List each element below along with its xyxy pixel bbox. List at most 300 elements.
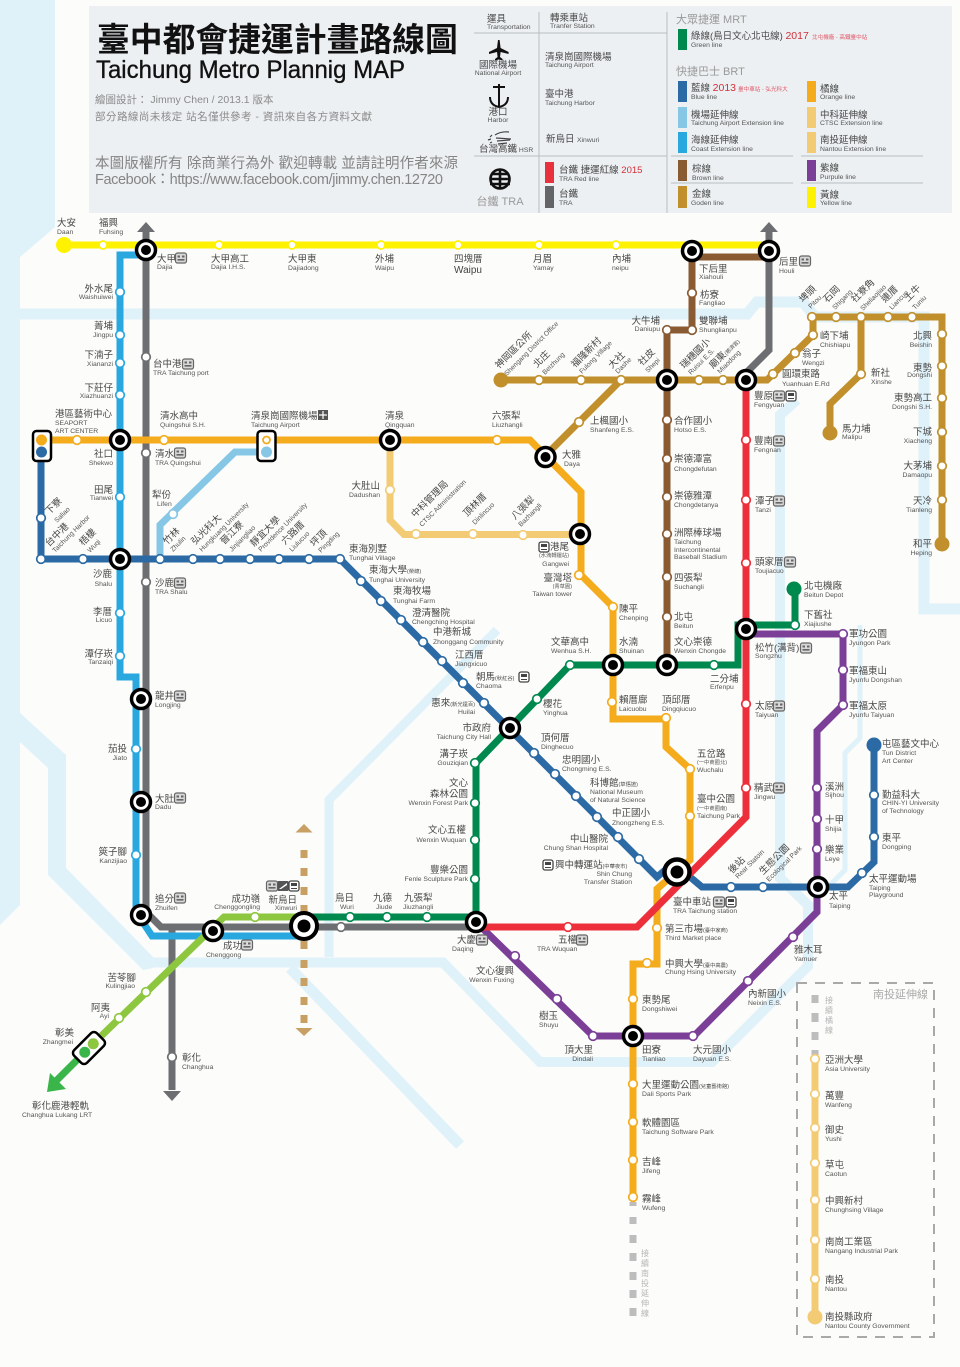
labels: Gold line: Wengzi: [802, 360, 825, 367]
labels: Blue BRT line: Liulucuo: [288, 530, 311, 553]
labels: Blue BRT line: 台中港: [43, 520, 72, 549]
line: Purple: [476, 634, 843, 1036]
legend: TRA lines: [545, 162, 642, 208]
legend: MRT and BRT lines: Blue line: [691, 94, 717, 101]
gray continuation dashes: Orange line: 線: [641, 1308, 649, 1318]
stations: Red: [564, 436, 750, 931]
labels: Blue BRT line: 後站: [726, 854, 748, 876]
credits: 繪圖設計： Jimmy Chen / 2013.1 版本: [95, 93, 274, 106]
labels: Orange line: 清水高中: [160, 410, 198, 422]
labels: Yellow line: 大甲高工: [211, 253, 250, 265]
labels: Gold line: 連厝: [879, 283, 901, 305]
gray continuation dashes: Orange line: 伸: [641, 1298, 649, 1308]
labels: Airport Extension line: Lifen: [157, 501, 172, 508]
labels: Red line: 頭家厝: [755, 556, 784, 568]
labels: Gold line: Miaodong: [716, 349, 743, 375]
icon: anchor: [490, 84, 508, 107]
labels: Orange line: 賴厝廍: [619, 694, 648, 706]
labels: Yellow line: neipu: [612, 265, 629, 272]
legend: MRT and BRT lines: Green line: [691, 42, 723, 49]
labels: Blue BRT line: Zhulin: [169, 535, 188, 553]
transport column: Tranfer Station: [550, 23, 595, 30]
labels: Blue BRT line: Zhonggang Community: [433, 639, 504, 646]
labels: CTSC Extension line: 大肚山: [351, 480, 380, 492]
labels: Purple line: Shuyu: [539, 1022, 558, 1029]
labels: light green and LRT: 彰美: [55, 1027, 74, 1039]
labels: Orange line: 港尾: [550, 541, 569, 553]
line: Green MRT: [304, 590, 795, 917]
arrows: TRA ends: [137, 222, 778, 1101]
labels: TRA line: 台中港: [153, 358, 182, 370]
labels: Orange line: 中興大學(臺中高農): [665, 958, 728, 970]
labels: Yellow line: Houli: [779, 268, 795, 275]
labels: Purple line: Dayuan E.S.: [693, 1056, 731, 1063]
labels: Coast Extension line: Dadu: [155, 804, 171, 811]
labels: Gold line: Beishin: [910, 342, 932, 349]
labels: Purple line: Tianliao: [642, 1056, 666, 1063]
paired station: Seaport Art Center: [33, 431, 51, 461]
labels: Blue BRT line: 朝馬(秋紅谷): [476, 672, 515, 683]
labels: Yellow line: Daan: [57, 229, 73, 236]
labels: Purple line: 田寮: [642, 1044, 662, 1056]
labels: Blue BRT line: Tunghai University: [369, 577, 426, 584]
labels: Blue BRT line: 澄清醫院: [412, 607, 451, 619]
labels: Coast Extension line: Tianwei: [90, 495, 113, 502]
labels: Gold line: Ruisui E.S.: [687, 348, 716, 376]
labels: light green and LRT: [22, 893, 297, 1119]
labels: Gold line: Tianleng: [906, 507, 932, 514]
labels: Nantou Extension line: Nantou County Government: [825, 1323, 910, 1330]
labels: CTSC Extension line: Bazhangli: [517, 502, 544, 528]
labels: Brown line: 枋寮: [700, 289, 720, 301]
labels: Gold line: Pitou: [807, 294, 824, 310]
labels: Brown line: Chongdefutan: [674, 466, 717, 473]
labels: Green line: Gouziqian: [437, 760, 468, 767]
labels: Blue BRT line: Art Center: [882, 758, 914, 765]
labels: Blue BRT line: 頂何厝: [541, 732, 570, 744]
transport column: National Airport: [475, 70, 521, 77]
labels: Gold line: 社皮: [636, 346, 658, 368]
stations: Orange: [73, 436, 694, 1201]
stations: Airport Extension: [169, 510, 177, 518]
labels: light green and LRT: Changhua Lukang LRT: [22, 1112, 92, 1119]
title: [96, 21, 458, 84]
stations: Blue BRT: [37, 514, 878, 891]
labels: Brown line: Daniupu: [635, 326, 660, 333]
labels: Yellow line: Fuhsing: [99, 229, 123, 236]
labels: Yellow line: 大甲東: [288, 253, 317, 265]
labels: Green line: 文心五權: [428, 824, 466, 836]
legend: MRT and BRT lines: Coast Extension line: [691, 146, 753, 153]
labels: Blue BRT line: Taichung City Hall: [437, 734, 491, 741]
labels: CTSC Extension line: 八張犁: [509, 493, 537, 522]
labels: Nantou Extension line: Nangang Industrial Park: [825, 1248, 899, 1255]
labels: Blue BRT line: Chung Shan Hospital: [544, 845, 608, 852]
legend: MRT and BRT lines: 綠線(烏日文心北屯線) 2017: [691, 30, 809, 42]
labels: Purple line: Shijia: [825, 826, 842, 833]
labels: Gold line: 北庄: [531, 348, 553, 370]
credits: 部分路線尚未核定 站名僅供參考 - 資訊來自各方資料文獻: [95, 110, 372, 123]
line: Yellow: [64, 242, 768, 248]
labels: Coast Extension line: Shekwo: [89, 460, 113, 467]
labels: Coast Extension line: Shalu: [95, 581, 112, 588]
legend: MRT and BRT lines: 橘線: [820, 83, 840, 95]
paired station: Zhangmei: [71, 1030, 107, 1066]
labels: Coast Extension line: Jiato: [113, 755, 127, 762]
labels: TRA line: TRA Quingshui: [155, 460, 201, 467]
labels: Brown line: 下后里: [699, 264, 728, 275]
labels: Blue BRT line: Chaoma: [476, 683, 502, 690]
legend: MRT and BRT lines: Nantou Extension line: [820, 146, 886, 153]
labels: Blue BRT line: Transfer Station: [584, 879, 632, 886]
labels: Orange line: Chung Hsing University: [665, 969, 737, 976]
labels: Blue BRT line: 中山醫院: [570, 833, 608, 845]
labels: Coast Extension line: 菁埔: [94, 320, 113, 332]
labels: Red line: 精武: [754, 782, 774, 794]
panel: Nantou extension: 線: [825, 1025, 833, 1035]
labels: Orange line: [55, 408, 741, 1212]
legend: MRT and BRT lines: Yellow line: [820, 200, 852, 207]
labels: Gold line: 崎下埔: [820, 330, 849, 342]
labels: Coast Extension line: [79, 283, 242, 959]
labels: Yellow line: [57, 217, 798, 276]
legend panel: [89, 6, 952, 213]
legend: MRT and BRT lines: Goden line: [691, 200, 724, 207]
icon: TRA logo: [490, 170, 510, 188]
panel: Nantou extension: 南投延伸線: [873, 987, 928, 1001]
labels: Blue BRT line: 中港新城: [433, 626, 472, 638]
labels: Nantou Extension line: Wanfeng: [825, 1102, 852, 1109]
labels: Purple line: 雅木耳: [794, 944, 823, 956]
labels: Purple line: Leye: [825, 856, 840, 863]
transport column: 清泉崗國際機場: [545, 51, 612, 63]
labels: Orange line: Quingshui S.H.: [160, 422, 206, 429]
labels: light green and LRT: Zhangmei: [43, 1039, 73, 1046]
labels: Red line: Jingwu: [754, 794, 775, 801]
labels: Blue BRT line: 竹林: [161, 525, 183, 547]
labels: Green line: 森林公園: [430, 788, 468, 800]
stations: TRA: [142, 353, 345, 1061]
labels: Gold line: Beizhung: [541, 351, 567, 376]
legend: TRA lines: TRA: [559, 200, 573, 207]
gray continuation dashes: Orange line: [633, 1202, 649, 1318]
labels: Blue BRT line: 生態公園: [757, 842, 792, 877]
labels: Gold line: Malipu: [842, 434, 862, 441]
labels: Gold line: 瑞穗國小: [678, 335, 713, 371]
labels: Gold line: Xinshe: [871, 379, 892, 386]
labels: light green and LRT: 成功嶺: [231, 893, 260, 905]
labels: CTSC Extension line: [349, 478, 544, 528]
labels: Yellow line: 外埔: [375, 253, 395, 265]
labels: TRA line: Changhua: [182, 1064, 214, 1071]
labels: Orange line: 霧峰: [642, 1194, 662, 1205]
labels: Gold line: 石岡: [821, 284, 843, 305]
stations: Brown: [663, 289, 696, 621]
labels: Red line: Toujiacuo: [755, 568, 784, 575]
labels: Purple line: 軍功公園: [849, 629, 887, 640]
labels: Airport Extension line: 犁份: [152, 489, 172, 501]
labels: Orange line: Dingqiucuo: [662, 706, 696, 713]
legend: MRT and BRT lines: CTSC Extension line: [820, 120, 883, 127]
labels: Gold line: Sheliaojiao: [859, 284, 888, 312]
labels: Orange line: Qingquan: [385, 422, 415, 429]
paired station: Taichung Airport: [258, 431, 276, 461]
labels: Blue BRT line: 勤益科大: [882, 789, 921, 801]
stations: Yellow: [99, 241, 620, 249]
labels: Blue BRT line: 太平運動場: [869, 873, 917, 885]
labels: Red line: 松竹(溝背): [755, 642, 799, 654]
labels: Gold line: 埤頭: [797, 283, 819, 305]
labels: light green and LRT: Xinwuri: [275, 905, 297, 912]
labels: Yellow line: 大甲: [157, 253, 176, 265]
interchange centers: [115, 245, 823, 1041]
labels: Coast Extension line: 追分: [155, 893, 175, 905]
labels: Nantou Extension line: 草屯: [825, 1159, 844, 1171]
labels: Nantou Extension line: 中興新村: [825, 1195, 864, 1207]
gray continuation dashes: Orange line: 南: [641, 1268, 649, 1278]
labels: Blue BRT line: 市政府: [462, 722, 491, 734]
labels: Blue BRT line: Providence University: [257, 502, 309, 553]
labels: Blue BRT line: 下寮: [43, 495, 65, 517]
line: Nantou Extension: [812, 1059, 818, 1317]
labels: Gold line: Yuanhuan E.Rd: [782, 381, 830, 388]
legend: MRT and BRT lines: [676, 12, 886, 208]
labels: Brown line: 大牛埔: [631, 315, 660, 327]
labels: Gold line: 圓環東路: [782, 368, 821, 380]
labels: Purple line: 頂大里: [564, 1044, 593, 1056]
labels: Purple line: Jyungon Park: [849, 640, 891, 647]
labels: Gold line: 北興: [913, 331, 932, 342]
labels: Blue BRT line: of Natural Science: [590, 797, 646, 804]
labels: Orange line: Daya: [564, 461, 580, 468]
labels: Brown line: Shunglianpu: [699, 327, 737, 334]
labels: Yellow line: Waipu: [454, 265, 482, 276]
copyright: Facebook：https://www.facebook.com/jimmy.chen.12720: [95, 172, 443, 188]
labels: Gold line: 東勢高工: [894, 392, 932, 404]
labels: Purple line: 內新國小: [748, 988, 787, 1000]
labels: light green and LRT: Kulingjiao: [106, 983, 135, 990]
labels: Blue BRT line: 東海別墅: [349, 543, 388, 555]
labels: Purple line: 太平: [829, 890, 848, 902]
labels: Blue BRT line: 江西厝: [455, 650, 484, 661]
labels: Orange line: 清泉崗國際機場: [251, 410, 318, 422]
legend: MRT and BRT lines: Purpule line: [820, 174, 856, 181]
labels: Orange line: Taichung Airport: [251, 422, 300, 429]
labels: Yellow line: Waipu: [375, 265, 394, 272]
labels: Green line: Wuri: [340, 904, 354, 911]
labels: Green line: Yinghua: [543, 710, 568, 717]
labels: Blue BRT line: 惠來(新光遠百): [431, 697, 475, 709]
labels: Brown line: Fangliao: [699, 300, 725, 307]
labels: Green line: Jiuzhangli: [403, 904, 434, 911]
labels: light green and LRT: 苦苓腳: [107, 972, 136, 984]
labels: Red line: 潭子: [755, 495, 774, 507]
labels: CTSC Extension line: 中科管理局: [409, 478, 451, 520]
labels: Blue BRT line: 東海牧場: [393, 585, 432, 597]
labels: Purple line: Taiping: [829, 903, 851, 910]
labels: Red line: Songzhu: [755, 653, 782, 660]
labels: Blue BRT line: Rear Statoin: [734, 849, 766, 880]
labels: Blue BRT line: Saliao: [53, 506, 72, 524]
line: Gold: [501, 317, 942, 544]
labels: CTSC Extension line: Dadushan: [349, 492, 380, 499]
labels: light green and LRT: 阿夷: [91, 1002, 110, 1014]
transport column: 運具: [487, 13, 507, 25]
labels: Brown line: Suchangli: [674, 584, 704, 591]
labels: Brown line: Beitun: [674, 623, 693, 630]
line: Brown: [667, 257, 768, 665]
legend: MRT and BRT lines: Orange line: [820, 94, 855, 101]
legend dividers: [474, 12, 923, 213]
line: TRA gray: [137, 222, 778, 1101]
labels: Green line: 文華高中: [551, 636, 589, 648]
labels: Blue BRT line: Jiangxicuo: [455, 661, 487, 668]
labels: Gold line: 新社: [871, 367, 890, 379]
labels: Orange line: 大雅: [562, 449, 582, 461]
labels: Orange line: 頂邱厝: [662, 695, 691, 706]
labels: light green and LRT: 彰化鹿港輕軌: [32, 1100, 90, 1112]
labels: Blue BRT line: 臺中車站: [673, 896, 712, 908]
labels: Gold line: Dashe: [614, 356, 633, 375]
labels: Orange line: (一中商圈北): [697, 758, 727, 766]
labels: Blue BRT line: 東海大學(榮總): [369, 564, 421, 576]
copyright: 本圖版權所有 除商業行為外 歡迎轉載 並請註明作者來源: [95, 155, 458, 172]
labels: Brown line: 北屯: [674, 611, 694, 623]
labels: Orange line: Dongshiwei: [642, 1006, 678, 1013]
legend: MRT and BRT lines: 機場延伸線: [691, 109, 739, 121]
gray continuation dashes: Orange line: 接: [641, 1248, 649, 1258]
labels: Gold line: 社寮角: [849, 276, 877, 305]
labels: Green line: 九德: [373, 892, 393, 904]
labels: Orange line: Wuchalu: [697, 767, 724, 774]
labels: Green line: 櫻花: [543, 698, 562, 710]
labels: Orange line: 東勢尾: [642, 994, 671, 1006]
labels: Purple line: Sijhou: [825, 792, 844, 799]
labels: Purple line: 軍福東山: [849, 665, 887, 677]
labels: Gold line: 土牛: [902, 282, 924, 304]
labels: Yellow line: 大安: [57, 217, 76, 229]
labels: Gold line: [493, 276, 932, 557]
gray continuation dashes: Orange line: 投: [641, 1278, 649, 1288]
labels: Blue BRT line: Zhongzheng E.S.: [612, 820, 665, 827]
labels: Gold line: Heping: [910, 550, 932, 557]
legend: MRT and BRT lines: 黃線: [820, 189, 840, 201]
labels: Green line: Wenhua S.H.: [551, 648, 591, 655]
transport column: 港口: [488, 106, 508, 118]
legend: MRT and BRT lines: 中科延伸線: [820, 109, 868, 121]
labels: Purple line: 樹玉: [539, 1010, 558, 1022]
transport column: 台灣高鐵 HSR: [479, 143, 533, 155]
stations: light green: [115, 913, 259, 1022]
labels: Purple line: 溪洲: [825, 781, 844, 793]
labels: TRA line: 沙鹿: [155, 577, 175, 589]
labels: Brown line: Intercontinental: [674, 547, 721, 554]
line: Coast Extension: [120, 255, 304, 936]
labels: Blue BRT line: Hungkuang University: [198, 501, 251, 553]
labels: Coast Extension line: 李厝: [93, 607, 112, 618]
transport column: [475, 12, 612, 208]
labels: Yellow line: 月眉: [533, 254, 552, 265]
labels: Green line: 北屯機廠: [804, 580, 843, 592]
labels: light green and LRT: Ayi: [100, 1013, 109, 1020]
legend: MRT and BRT lines: 快捷巴士 BRT: [676, 64, 745, 78]
labels: Orange line: Shuinan: [619, 648, 644, 655]
gray continuation dashes: Orange line: 續: [641, 1258, 649, 1268]
labels: Yellow line: 內埔: [612, 253, 632, 265]
labels: Orange line: Third Market place: [665, 935, 722, 942]
labels: Blue BRT line: 東平: [882, 832, 902, 844]
labels: Purple line: Neixin E.S.: [748, 1000, 782, 1007]
labels: Orange line: 大里運動公園(兒童藝術館): [642, 1079, 729, 1091]
labels: Brown line: 合作國小: [674, 415, 713, 427]
labels: Nantou Extension line: 萬豐: [825, 1090, 844, 1102]
labels: Coast Extension line: 下莊仔: [84, 382, 113, 394]
labels: Blue BRT line: Pingding: [317, 531, 341, 554]
labels: Blue BRT line: Shin Chung: [596, 871, 632, 878]
labels: Orange line: Chenping: [619, 615, 648, 622]
labels: Gold line: Shepi: [644, 357, 662, 374]
labels: Green line: 文心崇德: [674, 636, 713, 648]
labels: Brown line: 崇德雅潭: [674, 490, 713, 502]
labels: Gold line: Shengang District Office: [503, 321, 560, 377]
terminals: [56, 237, 950, 1324]
labels: Blue BRT line: Ecological Park: [765, 845, 804, 883]
labels: Blue BRT line: Dongping: [882, 844, 911, 851]
labels: Red line: 豐原: [754, 390, 773, 402]
labels: TRA line: TRA Taichung port: [153, 370, 209, 377]
labels: Blue BRT line: 弘光科大: [189, 511, 224, 547]
panel: Nantou extension: 橘: [825, 1015, 833, 1025]
labels: Orange line: Gangwei: [542, 561, 569, 568]
panel: Nantou extension: 續: [825, 1005, 833, 1015]
transport column: Taichung Harbor: [545, 100, 596, 107]
labels: Blue BRT line: of Technology: [882, 808, 924, 815]
labels: Nantou Extension line: 御史: [825, 1124, 844, 1136]
labels: Coast Extension line: Zhuifen: [155, 905, 178, 912]
legend: MRT and BRT lines: 南投延伸線: [820, 134, 868, 146]
labels: TRA line: [153, 358, 578, 1071]
transport column: 轉乘車站: [550, 12, 589, 24]
labels: Brown line: 四張犁: [674, 572, 703, 584]
labels: Yellow line: 四塊厝: [454, 253, 483, 265]
labels: Blue BRT line: 中正國小: [612, 807, 651, 819]
transport column: Xinwuri: [577, 137, 600, 144]
stations: Purple: [511, 630, 847, 1040]
transport column: 臺中港: [545, 88, 574, 100]
labels: Blue BRT line: TRA Taichung station: [673, 908, 737, 915]
legend: TRA lines: 台鐵: [559, 188, 578, 200]
labels: Blue BRT line: 六路厝: [279, 518, 307, 547]
labels: Blue BRT line: 靜宜大學: [248, 514, 283, 549]
labels: Orange line: Liuzhangli: [492, 422, 523, 429]
labels: Nantou Extension line: 南投縣政府: [825, 1311, 873, 1323]
labels: Blue BRT line: 屯區藝文中心: [882, 738, 940, 750]
labels: light green and LRT: 新烏日: [268, 894, 297, 906]
labels: Gold line: Liancuo: [888, 289, 910, 311]
labels: Green line: Wenxin Wuquan: [416, 837, 466, 844]
labels: Yellow line: Dajia I.H.S.: [211, 264, 245, 271]
panel: Nantou extension: [797, 983, 934, 1337]
labels: Orange line: Taiwan tower: [532, 591, 573, 598]
labels: Blue BRT line: Wuqi: [86, 538, 103, 554]
labels: Purple line: Daqing: [452, 946, 474, 953]
labels: Yellow line: Dajiadong: [288, 265, 319, 272]
labels: Coast Extension line: 外水尾: [84, 283, 113, 295]
labels: Orange line: Taichung Software Park: [642, 1129, 714, 1136]
labels: Gold line: Chishiapu: [820, 342, 850, 349]
labels: Orange line: SEAPORT: [55, 420, 87, 427]
labels: Orange line: (水湳轉運站): [539, 551, 569, 559]
